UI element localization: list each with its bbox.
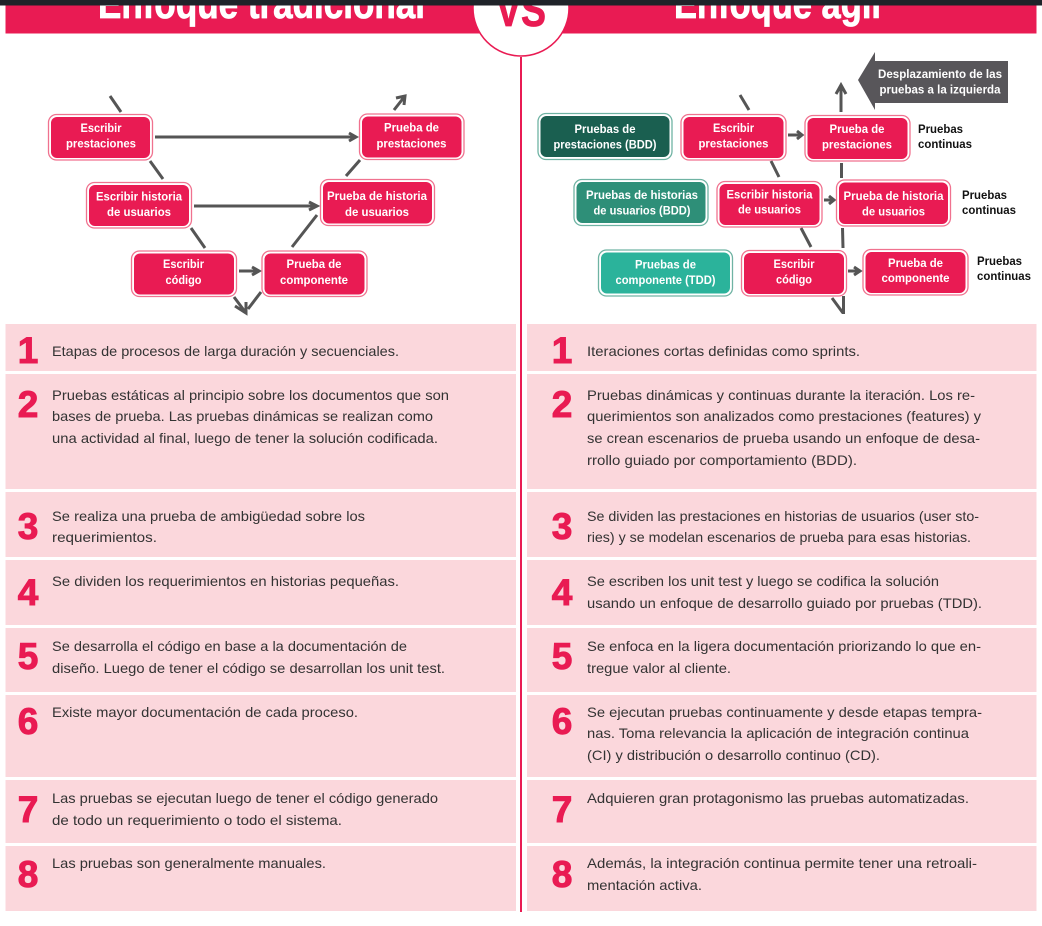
row 1: 1	[18, 330, 38, 371]
row 4: Se escriben los unit test y luego se codifica la solución	[587, 573, 939, 589]
box: prueba de prestaciones	[360, 114, 464, 160]
box: pruebas de historias BDD: de usuarios (BDD)	[594, 204, 690, 218]
box: prueba de componente: componente	[280, 273, 348, 287]
box: prueba de historia: Prueba de historia	[844, 189, 944, 203]
box: prueba de componente	[863, 250, 968, 295]
row 3	[527, 492, 1036, 557]
label: pruebas continuas 3	[977, 254, 1031, 283]
row 4: Se dividen los requerimientos en historias pequeñas.	[52, 573, 399, 589]
row 3	[6, 492, 516, 557]
box: prueba de componente: Prueba de	[888, 256, 943, 270]
row 8: 8	[18, 854, 38, 895]
box: escribir prestaciones: Escribir	[713, 121, 754, 135]
label: pruebas continuas 1: Pruebas	[918, 122, 963, 136]
box: escribir prestaciones	[48, 114, 152, 160]
row 6: nas. Toma relevancia la aplicación de integración continua	[587, 725, 969, 741]
row 6	[527, 695, 1036, 777]
box: prueba de prestaciones	[805, 116, 910, 161]
box: pruebas de prestaciones BDD: Pruebas de	[574, 122, 636, 136]
row 5	[6, 628, 516, 692]
row 6: (CI) y distribución o desarrollo continuo (CD).	[587, 747, 880, 763]
diagram: agile model	[538, 52, 1031, 314]
arrows	[740, 85, 860, 314]
label: pruebas continuas 2	[962, 188, 1016, 217]
header band	[6, 0, 1036, 34]
row 7: Adquieren gran protagonismo las pruebas automatizadas.	[587, 790, 969, 806]
row 7: Las pruebas se ejecutan luego de tener el código generado	[52, 790, 438, 806]
box: escribir prestaciones: prestaciones	[66, 136, 136, 150]
row 3: 3	[552, 506, 572, 547]
row 6: 6	[18, 701, 38, 742]
row 2: querimientos son analizados como prestaciones (features) y	[587, 408, 981, 424]
row 2: Pruebas dinámicas y continuas durante la iteración. Los re-	[587, 387, 975, 403]
arrows	[110, 96, 405, 313]
box: pruebas de prestaciones BDD: prestaciones (BDD)	[554, 138, 657, 152]
row 6	[6, 695, 516, 777]
row 8	[6, 846, 516, 911]
panel: traditional list	[6, 324, 516, 911]
box: pruebas de historias BDD	[574, 180, 708, 226]
row 5: 5	[18, 636, 38, 677]
row 4: 4	[552, 572, 573, 613]
label: pruebas continuas 3: Pruebas	[977, 254, 1022, 268]
row 1	[6, 324, 516, 371]
box: escribir historia: de usuarios	[107, 205, 171, 219]
callout: desplazamiento de las pruebas: Desplazamiento de las	[878, 67, 1002, 81]
box: pruebas de prestaciones BDD	[538, 114, 672, 160]
row 2	[527, 374, 1036, 489]
box: escribir codigo: Escribir	[774, 257, 815, 271]
box: pruebas de componente TDD	[598, 250, 732, 296]
row 8: mentación activa.	[587, 877, 702, 893]
box: prueba de historia	[320, 180, 434, 226]
box: escribir codigo: código	[776, 272, 812, 286]
row 7: de todo un requerimiento o todo el sistema.	[52, 812, 342, 828]
box: prueba de prestaciones: Prueba de	[830, 122, 885, 136]
box: escribir prestaciones	[681, 114, 786, 160]
box: prueba de prestaciones: prestaciones	[376, 136, 447, 150]
box: escribir historia: Escribir historia	[96, 190, 182, 204]
row 7	[6, 780, 516, 843]
row 3: 3	[18, 506, 38, 547]
box: prueba de prestaciones: prestaciones	[822, 138, 892, 152]
box: escribir prestaciones: prestaciones	[698, 136, 769, 150]
box: prueba de componente: componente	[882, 271, 950, 285]
row 8	[527, 846, 1036, 911]
row 5: 5	[552, 636, 572, 677]
row 2: 2	[18, 384, 38, 425]
row 1: Iteraciones cortas definidas como sprints.	[587, 343, 860, 359]
callout: desplazamiento de las pruebas: pruebas a la izquierda	[880, 82, 1001, 96]
box: escribir prestaciones: Escribir	[80, 121, 122, 135]
row 5: diseño. Luego de tener el código se desarrollan los unit test.	[52, 660, 445, 676]
box: prueba de historia: de usuarios	[862, 204, 925, 218]
row 2: Pruebas estáticas al principio sobre los documentos que son	[52, 387, 449, 403]
row 4	[527, 560, 1036, 625]
label: pruebas continuas 1: continuas	[918, 137, 972, 151]
top dark bar	[0, 0, 1042, 6]
row 7	[527, 780, 1036, 843]
row 5: Se desarrolla el código en base a la documentación de	[52, 638, 407, 654]
row 2: se crean escenarios de prueba usando un enfoque de desa-	[587, 430, 980, 446]
box: pruebas de componente TDD: componente (TDD)	[616, 273, 716, 287]
box: escribir historia: de usuarios	[738, 202, 801, 216]
row 5	[527, 628, 1036, 692]
row 8: Además, la integración continua permite tener una retroali-	[587, 855, 977, 871]
row 3: Se dividen las prestaciones en historias de usuarios (user sto-	[587, 508, 979, 524]
row 1: 1	[552, 330, 572, 371]
box: escribir codigo: Escribir	[163, 257, 204, 271]
label: pruebas continuas 1	[918, 122, 972, 151]
panel: agile list	[527, 324, 1036, 911]
row 7: 7	[18, 789, 38, 830]
row 2	[6, 374, 516, 489]
row 2: rrollo guiado por comportamiento (BDD).	[587, 452, 857, 468]
box: escribir codigo	[742, 250, 846, 296]
row 4	[6, 560, 516, 625]
row 1: Etapas de procesos de larga duración y secuenciales.	[52, 343, 399, 359]
row 7: 7	[552, 789, 572, 830]
row 5: Se enfoca en la ligera documentación priorizando lo que en-	[587, 638, 981, 654]
box: escribir codigo: código	[166, 273, 202, 287]
row 2: 2	[552, 384, 572, 425]
box: prueba de prestaciones: Prueba de	[384, 120, 439, 134]
label: pruebas continuas 3: continuas	[977, 269, 1031, 283]
box: escribir historia	[717, 182, 822, 227]
box: prueba de componente	[262, 251, 367, 296]
box: pruebas de historias BDD: Pruebas de historias	[586, 188, 698, 202]
box: escribir codigo	[132, 251, 236, 296]
box: prueba de historia: Prueba de historia	[327, 189, 427, 203]
center divider	[520, 57, 522, 912]
diagram: traditional V model	[48, 96, 464, 313]
box: pruebas de componente TDD: Pruebas de	[635, 258, 696, 272]
row 8: 8	[552, 854, 572, 895]
label: pruebas continuas 2: Pruebas	[962, 188, 1007, 202]
vs badge	[473, 0, 569, 56]
row 2: una actividad al final, luego de tener la solución codificada.	[52, 430, 438, 446]
row 8: Las pruebas son generalmente manuales.	[52, 855, 326, 871]
box: prueba de componente: Prueba de	[286, 257, 342, 271]
box: prueba de historia	[836, 180, 950, 226]
box: escribir historia	[86, 182, 192, 228]
row 4: usando un enfoque de desarrollo guiado por pruebas (TDD).	[587, 595, 982, 611]
row 1	[527, 324, 1036, 371]
row 3: requerimientos.	[52, 529, 157, 545]
row 6: Existe mayor documentación de cada proceso.	[52, 704, 358, 720]
row 4: 4	[18, 572, 39, 613]
row 3: ries) y se modelan escenarios de prueba para esas historias.	[587, 529, 971, 545]
row 6: 6	[552, 701, 572, 742]
row 3: Se realiza una prueba de ambigüedad sobre los	[52, 508, 365, 524]
row 5: tregue valor al cliente.	[587, 660, 731, 676]
box: prueba de historia: de usuarios	[345, 205, 409, 219]
label: pruebas continuas 2: continuas	[962, 203, 1016, 217]
row 2: bases de prueba. Las pruebas dinámicas se realizan como	[52, 408, 433, 424]
row 6: Se ejecutan pruebas continuamente y desde etapas tempra-	[587, 704, 982, 720]
callout: desplazamiento de las pruebas	[858, 52, 1008, 110]
box: escribir historia: Escribir historia	[726, 188, 813, 202]
